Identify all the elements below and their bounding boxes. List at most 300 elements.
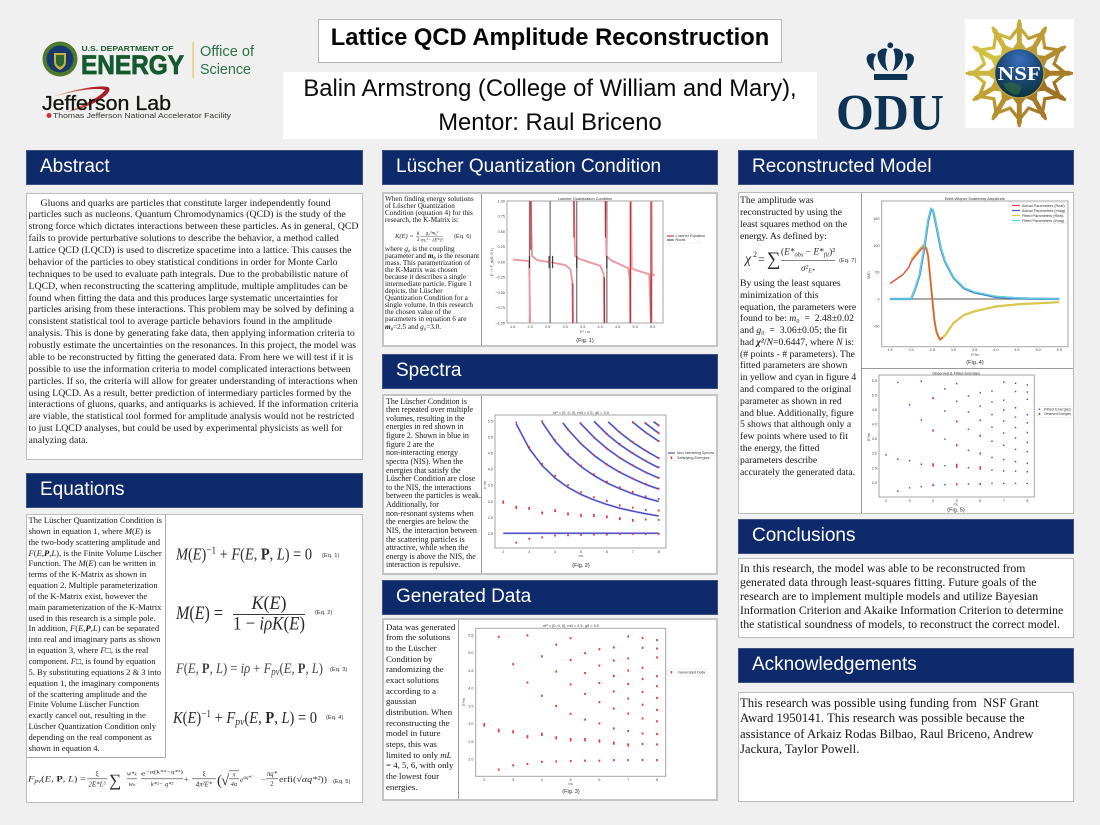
column divider and K-matrix text: research, the K-Matrix is: — [385, 216, 459, 224]
acknowledgements text: This research was possible using funding from NSF Grant — [740, 696, 1038, 710]
column divider — [861, 193, 862, 513]
abstract text: possible to use the information criteria to model complicated interactions between — [28, 364, 351, 375]
chart: Fig. 5 observed and fitted energies: 3.0 — [872, 452, 877, 456]
equation 7: fit — [824, 252, 829, 258]
logo: U.S. Department of Energy Office of Science: Science — [200, 62, 251, 78]
equations explanation text: main parameterization of the K-Matrix — [28, 602, 161, 612]
equation 4: F — [226, 708, 236, 727]
equation 5: ( — [41, 774, 45, 784]
reconstructed model results text: had χ²/N=0.6447, where N is: — [740, 337, 854, 348]
equation 7: E* — [812, 248, 824, 258]
K-matrix equation 6: 8 — [417, 232, 420, 237]
chart: Fig. 4 Breit-Wigner scattering amplitude: 1.5 — [887, 348, 893, 352]
equation 5: pv — [33, 779, 42, 785]
chart: Fig. 5 observed and fitted energies: 5.5 — [872, 379, 877, 383]
chart: Fig. 3 generated data: (Fig. 3) — [562, 789, 580, 795]
acknowledgements text: Jackura, Taylor Powell. — [740, 742, 859, 756]
abstract text: able to be reconstructed by fitting the generated data. From here we will test if it is — [28, 352, 353, 363]
K-matrix equation 6: (Eq. 6) — [454, 234, 471, 240]
spectra text: non-interacting energy — [386, 448, 458, 457]
chart: Fig. 1 Lüscher quantization condition — [490, 196, 705, 344]
equations explanation text: shown in equation 1, where M(E) is — [28, 526, 151, 536]
equation 5: F — [27, 774, 35, 784]
equation 1: + — [216, 544, 231, 564]
equation 7: )² — [829, 246, 835, 258]
generated data text: gaussian — [386, 696, 416, 706]
chart: Fig. 5 observed and fitted energies: E*/m — [867, 433, 871, 441]
abstract text: analysis. This is done by generating fake data, then applying information criteria to — [28, 328, 355, 339]
logo: U.S. Department of Energy Office of Science — [42, 42, 255, 80]
spectra text: The Lüscher Condition is — [386, 396, 467, 406]
logo: Jefferson Lab: Jefferson Lab — [42, 93, 171, 115]
equation 7: χ — [743, 252, 752, 267]
chart: Fig. 3 generated data: 4 — [541, 778, 543, 782]
reconstructed model results text: fitted parameters are shown — [740, 360, 847, 371]
chart: Fig. 2 spectra: 4 — [554, 550, 556, 554]
heading: Generated Data: Generated Data — [396, 586, 531, 607]
coupling parameter text: parameters in equation 6 are — [385, 315, 466, 323]
chart: Fig. 3 generated data: 2.0 — [468, 758, 474, 762]
equation 4: E, P, L) = 0 — [249, 708, 321, 727]
equation 2: K(E) — [251, 593, 286, 614]
equation 1: F(E, P, L) = 0 — [231, 544, 317, 564]
heading: Spectra — [382, 354, 718, 389]
chart: Fig. 3 generated data: 7 — [627, 778, 629, 782]
heading: Reconstructed Model: Reconstructed Model — [752, 156, 932, 177]
conclusions text: research are to implement multiple models and utilize Bayesian — [740, 590, 1038, 603]
chart: Fig. 5 observed and fitted energies: 2 — [885, 499, 887, 503]
chart: Fig. 1 Lüscher quantization condition: 0.75 — [498, 215, 505, 219]
equation 7: = — [758, 252, 765, 266]
chart: Fig. 1 Lüscher quantization condition: Roots — [676, 238, 686, 242]
chart: Fig. 1 Lüscher quantization condition: −0.50 — [495, 291, 505, 295]
panel: equations — [26, 514, 363, 803]
equations 1 to 5 — [27, 544, 350, 790]
equations explanation text: The Lüscher Quantization Condition is — [28, 515, 162, 525]
equations explanation text: Lüscher Quantization Condition only — [28, 721, 156, 731]
title — [318, 19, 782, 63]
equation 7: ∑ — [767, 249, 781, 270]
spectra text: figure 2. Shown in blue in — [386, 431, 469, 440]
spectra text: energy is above the NIS, the — [386, 552, 476, 561]
title: Lattice QCD Amplitude Reconstruction — [331, 24, 769, 51]
coupling parameter text: single volume. In this research — [385, 301, 473, 309]
reconstructed model results text: few points where used to fit — [740, 431, 848, 442]
abstract text: using LQCD. As a result, better prediction of intermediary particles formed by the — [28, 388, 351, 398]
equations explanation text: depending on the real component as — [28, 732, 152, 742]
chart: Fig. 4 Breit-Wigner scattering amplitude: (Fig. 4) — [966, 360, 984, 366]
reconstructed model results text: the energy, the fitted — [740, 443, 819, 454]
chart: Fig. 1 Lüscher quantization condition: −0.75 — [495, 306, 505, 310]
chart: Fig. 4 Breit-Wigner scattering amplitude: −50 — [873, 324, 880, 328]
equations explanation text: F(E,P,L), is the Finite Volume Lüscher — [28, 548, 162, 558]
logo: Jefferson Lab: Thomas Jefferson National Accelerator Facility — [53, 111, 231, 120]
spectra text: between the particles is weak. — [386, 491, 481, 500]
abstract text: behavior of the particles to obey statistical conditions in order for Monte Carlo — [28, 257, 338, 268]
abstract text: analyzing data. — [28, 435, 88, 446]
coupling parameter text: Quantization Condition for a — [385, 294, 468, 302]
equation 7: − — [803, 248, 813, 258]
logo: ODU — [836, 42, 944, 132]
K-matrix equation 6 — [394, 230, 472, 242]
coupling parameter text: m₀=2.5 and g₀=3.0. — [385, 323, 441, 331]
chart: Fig. 5 observed and fitted energies: 4.5 — [872, 408, 877, 412]
chart: Fig. 1 Lüscher quantization condition: 1.5 — [510, 325, 515, 329]
spectra text: figure 2 are the — [386, 440, 434, 449]
equation 4: K(E) — [173, 708, 202, 727]
chart: Fig. 4 Breit-Wigner scattering amplitude: M(E) — [867, 271, 871, 279]
chart: Fig. 4 Breit-Wigner scattering amplitude: E*/m — [971, 353, 979, 357]
abstract text — [28, 198, 358, 446]
equation 5: erfi(√ αq*² )) — [279, 774, 327, 784]
equation 1: −1 — [206, 544, 216, 556]
equation 5: 2E*L³ — [88, 780, 106, 788]
generated data text: Condition by — [386, 654, 432, 664]
equation 5: 4α — [231, 781, 238, 788]
spectra text: Additionally, for — [386, 500, 439, 509]
equation 7: 2 — [753, 250, 757, 259]
chart: Fig. 5 observed and fitted energies: 6 — [979, 499, 981, 503]
abstract text: Gluons and quarks are particles that constitute larger independently found — [40, 198, 331, 208]
equation 5: e — [141, 770, 144, 778]
panel: conclusions — [738, 558, 1074, 638]
equation 3: F(E, P, L) = iρ + F — [176, 661, 272, 677]
acknowledgements text — [740, 696, 1038, 756]
chart: Fig. 3 generated data: 5 — [570, 778, 572, 782]
equation 5: + — [184, 775, 189, 784]
equations explanation text: equation 2. Multiple parameterization — [28, 580, 158, 590]
generated data text: Data was generated — [386, 622, 455, 632]
equations explanation text: Function. The M(E) can be written in — [28, 558, 156, 568]
chart: Fig. 1 Lüscher quantization condition: 4.0 — [598, 325, 603, 329]
column divider and K-matrix text: When finding energy solutions — [385, 194, 474, 202]
equation 5: E, P, L) = — [45, 774, 84, 784]
chart: Fig. 3 generated data: mL — [568, 782, 574, 786]
equation 4: + — [211, 708, 226, 727]
equation 5: k*²− q*² — [151, 781, 174, 788]
equation 7: (Eq. 7) — [839, 258, 856, 264]
abstract text: Lattice QCD (LQCD) is used to discretize spacetime into a lattice. This causes the — [28, 245, 352, 256]
coupling parameter text — [385, 245, 480, 331]
conclusions text: generated data through least-squares fitting. Future goals of the — [740, 576, 1036, 589]
chart: Fig. 4 Breit-Wigner scattering amplitude — [862, 193, 1073, 369]
abstract text: fails to provide perturbative solutions to describe the behavior, a method called — [28, 233, 339, 244]
chart: Fig. 4 Breit-Wigner scattering amplitude: Fitted Parameters (Imag) — [1022, 219, 1065, 223]
equation 5: √ — [221, 773, 230, 789]
chart: Fig. 4 Breit-Wigner scattering amplitude: 50 — [875, 270, 880, 274]
author and mentor block: Balin Armstrong (College of William and Mary), — [303, 75, 797, 102]
chart: Fig. 2 spectra: 6 — [606, 550, 608, 554]
chart: Fig. 2 spectra: 5 — [580, 550, 582, 554]
equation 5: ∑ — [109, 771, 121, 790]
equations explanation text: the two-body scattering amplitude and — [28, 537, 160, 547]
generated data text: steps, this was — [386, 739, 437, 749]
chart: Fig. 2 spectra: 4.5 — [488, 452, 493, 456]
chart: Fig. 3 generated data: E*/m — [462, 698, 466, 706]
coupling parameter text: parameter and m₀ is the resonant — [385, 252, 479, 260]
reconstructed model results text: By using the least squares — [740, 278, 841, 289]
chart: Fig. 5 observed and fitted energies: 4 — [932, 499, 934, 503]
equations explanation text: equation 1, the imaginary components — [28, 678, 159, 688]
heading: Conclusions: Conclusions — [752, 525, 856, 546]
spectra text: volumes, resulting in the — [386, 414, 464, 423]
equations explanation text: In addition, F(E,P,L) can be separated — [28, 623, 159, 633]
equation 5: (Eq. 5) — [333, 779, 350, 785]
reconstructed model intro text: energy. As defined by: — [740, 231, 827, 242]
chart: Fig. 5 observed and fitted energies: 8 — [1026, 499, 1028, 503]
chart: Fig. 1 Lüscher quantization condition: Luscher Equation — [676, 234, 705, 238]
spectra text: interaction is repulsive. — [386, 560, 460, 569]
generated data text: reconstructing the — [386, 718, 450, 728]
chart: Fig. 2 spectra: (Fig. 2) — [572, 563, 590, 569]
chart: Fig. 2 spectra: 3.5 — [488, 484, 493, 488]
author and mentor block: Mentor: Raul Briceno — [438, 108, 662, 136]
reconstructed model results text: minimization of this — [740, 290, 819, 301]
reconstructed model results text: in yellow and cyan in figure 4 — [740, 372, 856, 383]
logo: NSF: NSF — [998, 63, 1041, 85]
chart: Fig. 2 spectra: Satisfying Energies — [677, 456, 710, 460]
equation 2: (Eq. 2) — [315, 610, 332, 616]
panel: abstract — [26, 193, 363, 460]
spectra text: attractive, while when the — [386, 543, 468, 552]
coupling parameter text: the chosen value of the — [385, 308, 451, 316]
chart: Fig. 4 Breit-Wigner scattering amplitude: 150 — [873, 217, 880, 221]
logo: U.S. Department of Energy Office of Science: Office of — [200, 44, 255, 60]
heading: Spectra: Spectra — [396, 360, 461, 381]
heading: Lüscher Quantization Condition: Lüscher Quantization Condition — [396, 156, 661, 177]
abstract text: strong force which dictates interactions between these particles. As in general, QCD — [28, 221, 358, 232]
heading: Reconstructed Model — [738, 150, 1074, 185]
chart: Fig. 2 spectra: 2.5 — [488, 516, 493, 520]
chart: Fig. 1 Lüscher quantization condition: 0.25 — [498, 245, 505, 249]
chart: Fig. 3 generated data: 3.0 — [468, 722, 474, 726]
reconstructed model results text: and g₀ = 3.06±0.05; the fit — [740, 325, 847, 336]
equations explanation text: used in this research is a simple pole. — [28, 613, 156, 623]
chart: Fig. 2 spectra: 5.5 — [488, 420, 493, 424]
chart: Fig. 4 Breit-Wigner scattering amplitude: Actual Parameters (Imag) — [1022, 209, 1066, 213]
chart: Fig. 1 Lüscher quantization condition: 3.0 — [563, 325, 568, 329]
chart: Fig. 2 spectra: 2 — [502, 550, 504, 554]
spectra text: spectra (NIS). When the — [386, 457, 463, 466]
chart: Fig. 1 Lüscher quantization condition: −0.25 — [495, 276, 505, 280]
equation 5: − — [261, 775, 266, 784]
chart: Fig. 2 spectra: 4.0 — [488, 468, 493, 472]
equation 5: αq*² — [243, 775, 253, 781]
equation 1: (Eq. 1) — [322, 553, 339, 559]
abstract text: found when fitting the data and this produces large systematic uncertainties for — [28, 292, 338, 304]
conclusions text — [740, 562, 1063, 631]
equation 3: (Eq. 3) — [330, 667, 347, 673]
equation 7: (E* — [781, 248, 795, 258]
chart: Fig. 3 generated data: 2 — [483, 778, 485, 782]
equations explanation text: in equation 3, where F□, is the real — [28, 645, 148, 655]
chart: Fig. 1 Lüscher quantization condition: 5.5 — [650, 325, 655, 329]
chart: Fig. 3 generated data: nP = [0, 0, 0], m0 = 2.5, g0 = 3.0 — [543, 623, 600, 628]
chart: Fig. 1 Lüscher quantization condition: 0.50 — [498, 230, 505, 234]
chart: Fig. 1 Lüscher quantization condition: Luscher Quantization Condition — [558, 196, 612, 201]
chart: Fig. 1 Lüscher quantization condition: 3.5 — [580, 325, 585, 329]
equation 7: σ² — [801, 263, 808, 273]
equation 4: ( — [244, 708, 249, 727]
chart: Fig. 2 spectra: 5.0 — [488, 436, 493, 440]
equations explanation text: terms of the K-Matrix as shown in — [28, 569, 146, 579]
spectra text: NIS, the interaction between — [386, 526, 477, 535]
reconstructed model results text — [740, 278, 856, 478]
logo: U.S. Department of Energy Office of Science: U.S. DEPARTMENT OF — [82, 44, 174, 53]
equation 7 — [743, 246, 856, 274]
equation 5: ξ — [95, 770, 99, 778]
chart: Fig. 5 observed and fitted energies: Observed & Fitted Energies — [932, 370, 980, 376]
reconstructed model intro text: The amplitude was — [740, 195, 814, 206]
abstract text: to just LQCD analyses, but could be used by experimental physicists as well for — [28, 423, 342, 434]
chart: Fig. 5 observed and fitted energies: 2.0 — [872, 481, 877, 485]
equations explanation text: shown in equation 4. — [28, 743, 100, 753]
heading: Abstract: Abstract — [40, 156, 110, 177]
spectra text: energies in red shown in — [386, 422, 463, 431]
chart: Fig. 3 generated data: 5.0 — [468, 651, 474, 655]
chart: Fig. 2 spectra: 8 — [658, 550, 660, 554]
chart: Fig. 4 Breit-Wigner scattering amplitude: 2.0 — [908, 348, 914, 352]
reconstructed model results text: and blue. Additionally, figure — [740, 408, 854, 419]
equation 5: e — [240, 775, 243, 784]
chart: Fig. 5 observed and fitted energies: 2.5 — [872, 466, 877, 470]
chart: Fig. 3 generated data — [462, 623, 708, 795]
spectra text: Lüscher Condition are close — [386, 474, 475, 483]
chart: Fig. 4 Breit-Wigner scattering amplitude: 0 — [877, 297, 880, 301]
equations explanation text: component. F□, is found by equation — [28, 656, 155, 666]
coupling parameter text: because it describes a single — [385, 273, 466, 281]
generated data text: according to a — [386, 686, 436, 696]
generated data text: = 4, 5, 6, with only — [386, 760, 453, 770]
chart: Fig. 2 spectra: 7 — [632, 550, 634, 554]
chart: Fig. 5 observed and fitted energies: 5.0 — [872, 394, 877, 398]
equation 3: ( — [280, 661, 284, 677]
chart: Fig. 5 observed and fitted energies: Fitted Energies — [1044, 408, 1071, 412]
reconstructed model results text: equation, the parameters were — [740, 302, 856, 313]
chart: Fig. 2 spectra: nP = [0, 0, 0], m0 = 2.5, g0 = 3.0 — [553, 410, 610, 415]
logo: Jefferson Lab — [42, 86, 231, 120]
column divider and K-matrix text — [384, 194, 482, 345]
reconstructed model results text: (# points - # parameters). The — [740, 349, 855, 360]
generated data text: limited to only mL — [386, 750, 452, 760]
abstract text: interactions of gluons, quarks, and antiquarks is achieved. If the information criteria — [28, 399, 358, 410]
chart: Fig. 4 Breit-Wigner scattering amplitude: 5.0 — [1035, 348, 1041, 352]
equation 3: E, P, L) — [284, 661, 324, 677]
equation 5: w*ₖ — [127, 770, 137, 778]
heading: Acknowledgements: Acknowledgements — [752, 654, 917, 675]
reconstructed model results text: parameters describe — [740, 455, 817, 466]
abstract text: LQCD, when reconstructing the scattering amplitude, multiple amplitudes can be — [28, 281, 348, 292]
coupling parameter text: mass. This parametrization of — [385, 259, 470, 267]
equation 7: E* — [807, 268, 815, 274]
coupling parameter text: intermediate particle. Figure 1 — [385, 280, 472, 288]
equation 3 — [175, 661, 347, 678]
chart: Fig. 4 Breit-Wigner scattering amplitude: 100 — [873, 244, 880, 248]
chart: Fig. 3 generated data: 2.5 — [468, 740, 474, 744]
chart: Fig. 1 Lüscher quantization condition: 1.00 — [498, 200, 505, 204]
equation 5 — [27, 770, 350, 790]
panel: spectra — [382, 394, 718, 575]
abstract text: are viable, the statistical tool formed for amplitude analysis would not be restricted — [28, 411, 354, 422]
panel: generated data — [382, 618, 718, 801]
logo: NSF — [965, 19, 1074, 128]
abstract text: techniques to be used to evaluate path integrals. Due to the probabilistic nature of — [28, 269, 348, 280]
chart: Fig. 1 Lüscher quantization condition: (Fig. 1) — [576, 338, 594, 344]
acknowledgements text: assistance of Arkaiz Rodas Bilbao, Raul Briceno, Andrew — [740, 727, 1034, 741]
equation 7: obs — [795, 252, 804, 258]
chart: Fig. 1 Lüscher quantization condition: 2.0 — [528, 325, 533, 329]
heading: Acknowledgements — [738, 648, 1074, 683]
author and mentor block — [283, 72, 817, 139]
heading: Abstract — [26, 150, 363, 185]
equation 1 — [175, 544, 339, 564]
equations explanation text: exactly cancel out, resulting in the — [28, 710, 146, 720]
equation 4: −1 — [201, 709, 211, 720]
heading: Equations — [26, 473, 363, 508]
abstract text: particles such as nucleons. Quantum Chromodynamics (QCD) is the study of the — [28, 209, 346, 220]
generated data text: energies. — [386, 782, 418, 792]
chart: Fig. 1 Lüscher quantization condition: 5.0 — [633, 325, 638, 329]
logo: U.S. Department of Energy Office of Science: ENERGY — [81, 50, 184, 80]
chart: Fig. 4 Breit-Wigner scattering amplitude: 3.0 — [951, 348, 956, 352]
generated data text: exact solutions — [386, 675, 439, 685]
spectra text: the energies are below the — [386, 517, 469, 526]
chart: Fig. 2 spectra — [484, 410, 716, 569]
chart: Fig. 1 Lüscher quantization condition: 2.5 — [545, 325, 550, 329]
chart: Fig. 5 observed and fitted energies: 3 — [908, 499, 911, 503]
coupling parameter text: the K-Matrix was chosen — [385, 266, 457, 274]
equations explanation text — [27, 514, 166, 758]
generated data text: to the Lüscher — [386, 643, 437, 653]
heading: Conclusions — [738, 519, 1074, 554]
panel: Lüscher quantization condition — [382, 192, 718, 347]
column divider and K-matrix text: Condition (equation 4) for this — [385, 209, 473, 217]
chart: Fig. 3 generated data: 6 — [598, 778, 600, 782]
chart: Fig. 4 Breit-Wigner scattering amplitude: Breit-Wigner Scattering Amplitude — [945, 196, 1006, 201]
spectra text: non-resonant systems when — [386, 509, 474, 518]
K-matrix equation 6: K(E) = — [394, 233, 414, 240]
generated data text — [384, 620, 459, 799]
chart: Fig. 2 spectra: mL — [578, 554, 584, 558]
generated data text: from the solutions — [386, 632, 450, 642]
spectra text: the scattering particles is — [386, 534, 465, 544]
chart: Fig. 3 generated data: 4.0 — [468, 686, 474, 690]
equation 5: −α(k*²−q*²) — [145, 770, 184, 776]
spectra text: then repeated over multiple — [386, 405, 473, 414]
equation 5: 2 — [270, 781, 274, 788]
equation 4: (Eq. 4) — [326, 715, 343, 721]
equation 2 — [175, 593, 332, 634]
heading: Equations: Equations — [40, 479, 125, 500]
equation 5: πq* — [267, 771, 278, 778]
chart: Fig. 1 Lüscher quantization condition: −1.00 — [495, 322, 505, 326]
spectra text: to the NIS, the interactions — [386, 483, 471, 492]
reconstructed model results text: and compared to the original — [740, 384, 851, 395]
chart: Fig. 5 observed and fitted energies — [867, 370, 1072, 513]
equations explanation text: of the K-Matrix exist, however the — [28, 591, 147, 601]
chart: Fig. 1 Lüscher quantization condition: 0.00 — [498, 260, 505, 264]
chart: Fig. 3 generated data: 3.5 — [468, 704, 474, 708]
chart: Fig. 4 Breit-Wigner scattering amplitude: Actual Parameters (Real) — [1022, 204, 1065, 208]
equations explanation text: 5. By substituting equations 2 & 3 into — [28, 667, 161, 677]
column divider and K-matrix text: of Lüscher Quantization — [385, 202, 455, 210]
acknowledgements text: Award 1950141. This research was possible because the — [740, 711, 1025, 725]
equation 3: pv — [270, 667, 280, 678]
generated data text: distribution. When — [386, 707, 452, 717]
equation 4: pv — [234, 716, 244, 728]
chart: Fig. 3 generated data: 4.5 — [468, 669, 474, 673]
reconstructed model results text: 5 shows that although only a — [740, 419, 851, 430]
